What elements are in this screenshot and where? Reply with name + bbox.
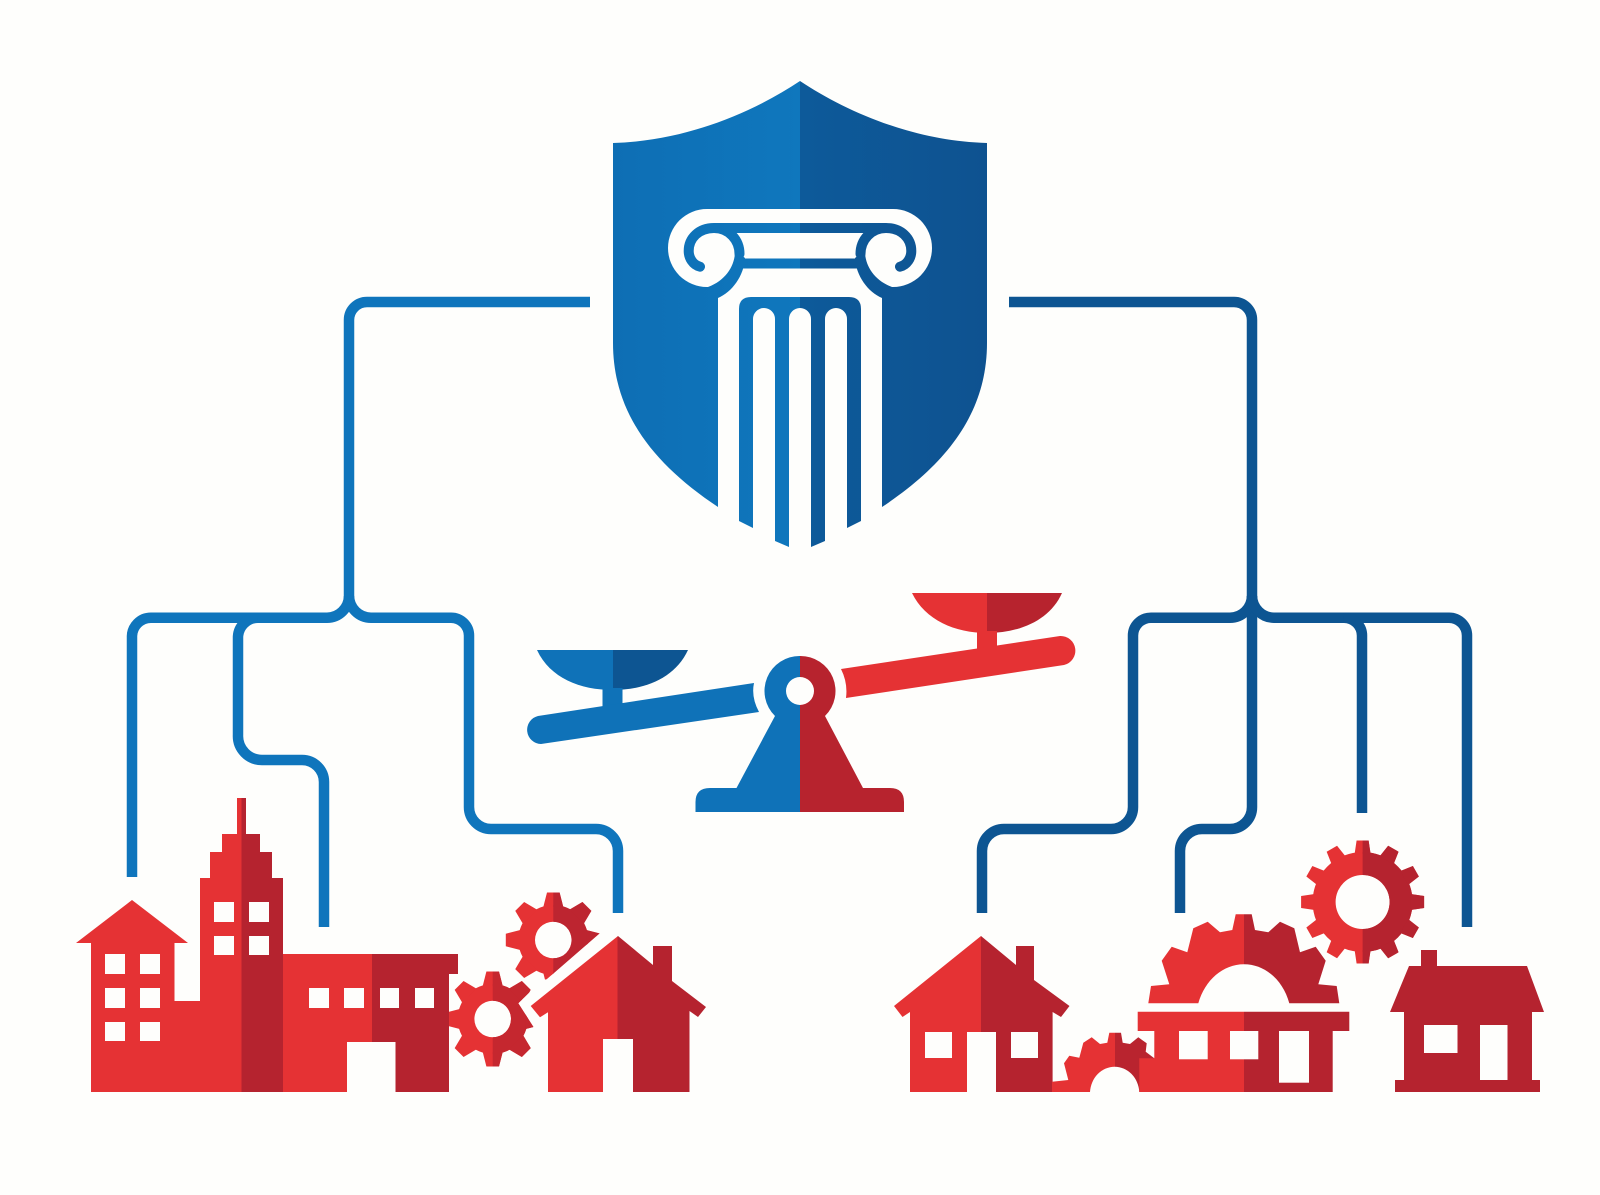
right pan (912, 593, 1062, 633)
panel: shield with column (613, 81, 987, 570)
buildings skyline (76, 798, 458, 1092)
illustration: left city group (76, 798, 706, 1092)
large half gear (1148, 914, 1339, 1003)
pivot and base (696, 656, 904, 812)
column flutes (739, 297, 861, 547)
gear lower (449, 972, 534, 1066)
capital scroll linework (689, 228, 911, 267)
gear upper (506, 892, 601, 988)
infographic canvas (76, 81, 1544, 1092)
left beam (527, 683, 759, 744)
left pan stem (602, 688, 622, 708)
right beam (841, 636, 1075, 698)
icon: balance scale (527, 593, 1075, 812)
house windows (925, 1032, 1038, 1058)
house (531, 936, 706, 1092)
right pan stem (977, 631, 997, 651)
house (894, 936, 1070, 1092)
dark house windows (1424, 1025, 1508, 1080)
dark house (1390, 950, 1544, 1092)
floating gear (1301, 840, 1424, 964)
column capital and shaft in white (668, 209, 932, 570)
connector: right pipe network (982, 302, 1467, 927)
building windows (1179, 1031, 1309, 1083)
illustration: right city group (894, 840, 1544, 1092)
left pan (537, 650, 688, 690)
building windows (105, 902, 434, 1041)
building (1138, 1012, 1349, 1092)
capital blue bands under scrolls (708, 250, 892, 298)
shield body (613, 81, 987, 507)
connector: left pipe network (132, 302, 618, 927)
small half gear (1052, 1033, 1154, 1092)
